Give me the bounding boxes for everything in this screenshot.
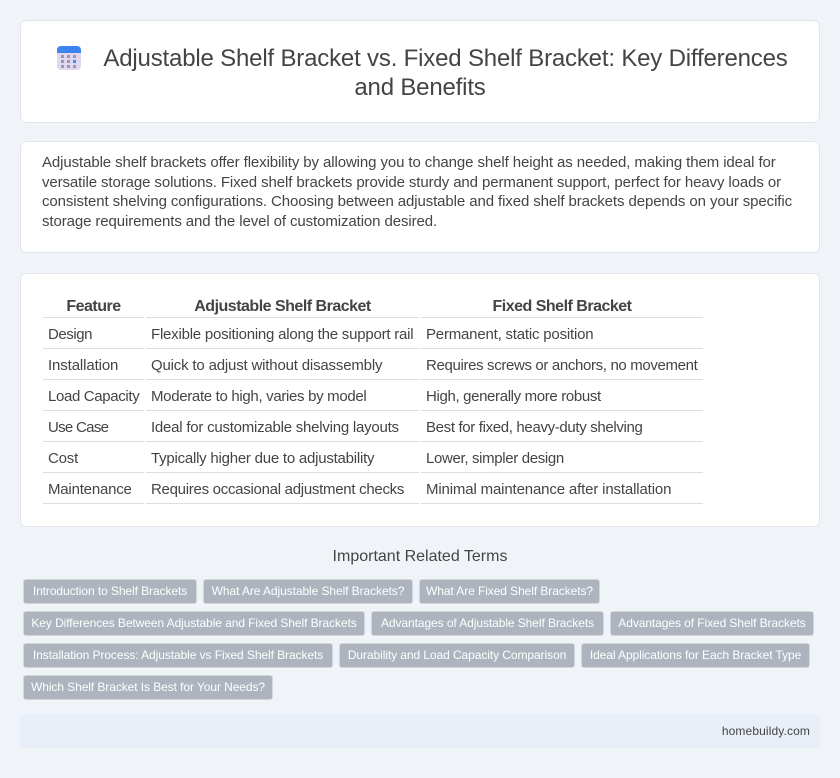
tag: Which Shelf Bracket Is Best for Your Needs? xyxy=(31,680,265,694)
row: design: Flexible positioning along the support rail xyxy=(151,326,413,343)
tag xyxy=(339,643,575,668)
row: use case: Use Case xyxy=(48,419,108,436)
row: cost: Lower, simpler design xyxy=(426,450,564,467)
row: installation: Requires screws or anchors, no movement xyxy=(426,357,697,374)
row: cost: Cost xyxy=(48,450,78,467)
tag: What Are Fixed Shelf Brackets? xyxy=(426,584,593,598)
tag: What Are Adjustable Shelf Brackets? xyxy=(212,584,404,598)
footer site name: homebuildy.com xyxy=(722,724,810,738)
row: design xyxy=(48,326,593,343)
intro paragraph xyxy=(42,154,792,230)
tag: Installation Process: Adjustable vs Fixed Shelf Brackets xyxy=(33,648,323,662)
row: use case: Ideal for customizable shelving layouts xyxy=(151,419,399,436)
tag xyxy=(419,579,600,604)
tag xyxy=(610,611,814,636)
row: load capacity xyxy=(48,388,602,405)
comparison table panel xyxy=(20,273,820,527)
tag xyxy=(23,611,365,636)
row: load capacity: Moderate to high, varies by model xyxy=(151,388,366,405)
row: maintenance: Requires occasional adjustment checks xyxy=(151,481,404,498)
tag: Advantages of Fixed Shelf Brackets xyxy=(618,616,806,630)
table header: Adjustable Shelf Bracket xyxy=(194,298,371,315)
related terms heading: Important Related Terms xyxy=(333,548,507,565)
row: cost xyxy=(48,450,564,467)
row: use case: Best for fixed, heavy-duty shelving xyxy=(426,419,643,436)
row: installation: Installation xyxy=(48,357,118,374)
row: load capacity: High, generally more robust xyxy=(426,388,601,405)
footer bar xyxy=(20,714,820,748)
row: cost: Typically higher due to adjustability xyxy=(151,450,374,467)
table xyxy=(43,298,703,504)
row: maintenance xyxy=(48,481,671,498)
intro paragraph: Adjustable shelf brackets offer flexibility by allowing you to change shelf height as needed, making them ideal for xyxy=(42,154,776,171)
header panel xyxy=(20,20,820,123)
related term tags xyxy=(23,579,814,700)
tag: Key Differences Between Adjustable and Fixed Shelf Brackets xyxy=(31,616,357,630)
tag: Durability and Load Capacity Comparison xyxy=(348,648,566,662)
intro paragraph: versatile storage solutions. Fixed shelf brackets provide sturdy and permanent support, perfect for heavy loads or xyxy=(42,174,781,191)
row: maintenance: Maintenance xyxy=(48,481,132,498)
intro text panel xyxy=(20,141,820,253)
row: load capacity: Load Capacity xyxy=(48,388,139,405)
tag: Introduction to Shelf Brackets xyxy=(33,584,187,598)
intro paragraph: storage requirements and the level of customization desired. xyxy=(42,213,437,230)
row: design: Design xyxy=(48,326,92,343)
icon: calendar xyxy=(57,46,81,70)
row: installation xyxy=(48,357,698,374)
row: use case xyxy=(48,419,643,436)
title: and Benefits xyxy=(354,74,486,101)
title: Adjustable Shelf Bracket vs. Fixed Shelf Bracket: Key Differences xyxy=(103,45,788,72)
row: design: Permanent, static position xyxy=(426,326,593,343)
table header: Fixed Shelf Bracket xyxy=(492,298,632,315)
tag xyxy=(23,675,273,700)
tag xyxy=(23,643,333,668)
tag: Ideal Applications for Each Bracket Type xyxy=(590,648,801,662)
intro paragraph: consistent shelving configurations. Choosing between adjustable and fixed shelf brackets depends on your specific xyxy=(42,193,792,210)
tag xyxy=(23,579,197,604)
table header xyxy=(66,298,632,315)
tag xyxy=(581,643,810,668)
table header: Feature xyxy=(66,298,121,315)
title xyxy=(103,45,788,101)
row: maintenance: Minimal maintenance after installation xyxy=(426,481,671,498)
tag: Advantages of Adjustable Shelf Brackets xyxy=(381,616,594,630)
row: installation: Quick to adjust without disassembly xyxy=(151,357,382,374)
tag xyxy=(371,611,604,636)
tag xyxy=(203,579,413,604)
